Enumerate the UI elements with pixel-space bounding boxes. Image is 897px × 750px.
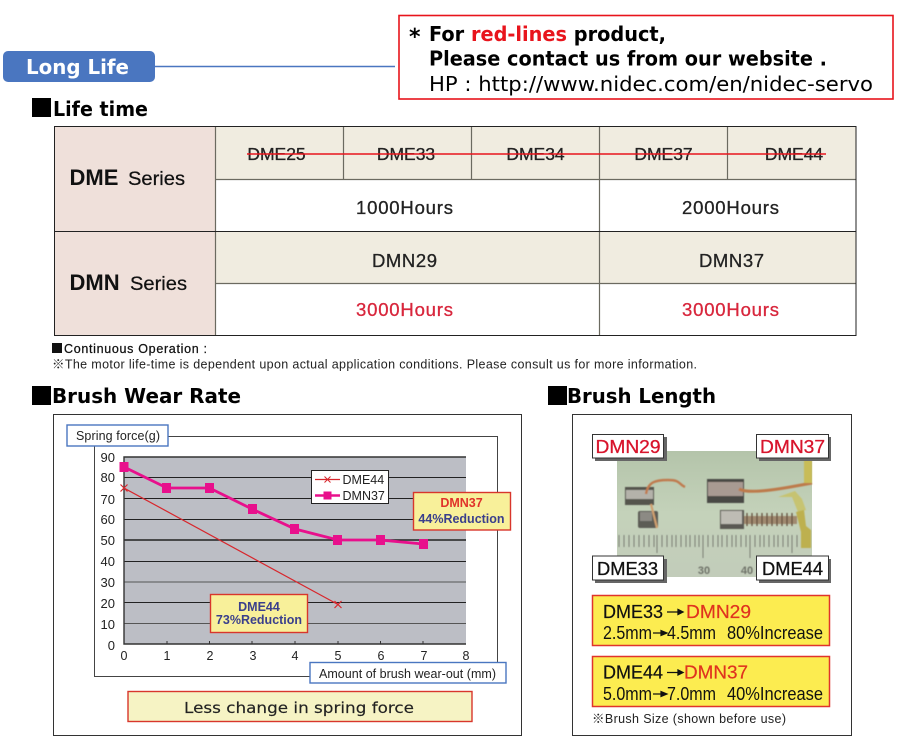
heading: Brush Length: Brush Length xyxy=(567,384,716,408)
x axis labels: 0 xyxy=(121,649,128,663)
legend: DME44 xyxy=(342,473,384,487)
label: DME33: DME33 xyxy=(597,559,658,579)
callout: DME44 reduction xyxy=(210,594,308,632)
callout: less change in spring force xyxy=(128,692,472,722)
y axis labels: 40 xyxy=(101,554,115,569)
axis label: spring force xyxy=(67,425,168,446)
x axis labels xyxy=(121,649,470,663)
y axis labels: 60 xyxy=(101,512,115,527)
label: DMN29: DMN29 xyxy=(596,437,660,457)
axis label: brush wear-out xyxy=(310,662,506,683)
axis label: brush wear-out: Amount of brush wear-out (mm) xyxy=(319,667,496,681)
DME life hours xyxy=(356,197,779,218)
callout: DME33 to DMN29: 4.5mm xyxy=(667,623,716,643)
brush DME44 xyxy=(720,510,811,548)
DME life hours: 2000Hours xyxy=(682,197,779,218)
brush DMN29 xyxy=(625,480,685,505)
callout: DME33 to DMN29: 2.5mm xyxy=(603,623,652,643)
life time table xyxy=(54,126,856,336)
heading: Brush Wear Rate: Brush Wear Rate xyxy=(52,384,241,408)
series: DME44 xyxy=(120,484,342,608)
y axis labels: 90 xyxy=(101,450,115,465)
DME series header: DME xyxy=(70,165,118,190)
section tag: Long Life: Long Life xyxy=(26,55,129,79)
chart frame xyxy=(94,436,498,676)
section tag: Long Life xyxy=(3,51,395,82)
callout: DMN37 reduction: 44%Reduction xyxy=(418,512,505,526)
y axis labels: 80 xyxy=(101,470,115,485)
ruler ticks xyxy=(619,535,807,558)
DMN life hours: 3000Hours xyxy=(682,299,779,320)
callout: DME44 to DMN37: 40%Increase xyxy=(727,684,823,704)
callout: DMN37 reduction: DMN37 xyxy=(440,496,483,510)
note: brush size: ※Brush Size (shown before use) xyxy=(592,712,786,726)
callout: DME44 to DMN37: DME44 xyxy=(603,662,663,682)
label: DMN37: DMN37 xyxy=(760,437,825,457)
label: DME44: DME44 xyxy=(762,559,823,579)
callout: DME33 to DMN29: DME33 xyxy=(603,602,663,622)
y axis labels: 10 xyxy=(101,617,115,632)
callout: DME33 to DMN29: 80%Increase xyxy=(727,623,823,643)
legend xyxy=(312,470,388,504)
label: DMN29 xyxy=(592,434,667,461)
y axis labels: 30 xyxy=(101,575,115,590)
y axis labels: 70 xyxy=(101,492,115,507)
notice box: red-lines product contact: For red-lines product, xyxy=(429,22,666,46)
y axis labels: 50 xyxy=(101,533,115,548)
x axis labels: 4 xyxy=(292,649,299,663)
callout: DME33 to DMN29 xyxy=(592,596,830,646)
DMN model names: DMN37 xyxy=(699,250,764,271)
DMN series header: Series xyxy=(130,273,187,295)
DMN life hours: 3000Hours xyxy=(356,299,453,320)
photo: brushes on a ruler: 40 xyxy=(741,565,753,577)
x axis labels: 3 xyxy=(250,649,257,663)
notice box: red-lines product contact xyxy=(399,16,893,99)
y axis labels xyxy=(101,450,115,653)
callout: DME44 to DMN37: 7.0mm xyxy=(667,684,716,704)
table footnotes: ※The motor life-time is dependent upon actual application conditions. Please consult us for more information. xyxy=(52,358,697,372)
x axis labels: 6 xyxy=(378,649,385,663)
label: DME33 xyxy=(592,556,667,583)
brush DME33 xyxy=(638,504,658,528)
callout: DME33 to DMN29: DMN29 xyxy=(686,602,751,622)
label: DMN37 xyxy=(756,434,831,461)
notice box: red-lines product contact: Please contact us from our website . xyxy=(429,46,827,70)
x axis labels: 7 xyxy=(421,649,428,663)
callout: DME44 to DMN37 xyxy=(592,656,830,706)
DMN life hours xyxy=(356,299,779,320)
callout: DME44 to DMN37: 5.0mm xyxy=(603,684,652,704)
line chart xyxy=(101,450,470,663)
DME model names: DME44 xyxy=(765,144,823,164)
label: DME44 xyxy=(756,556,831,583)
callout: DME44 reduction: DME44 xyxy=(238,600,280,614)
DMN model names: DMN29 xyxy=(372,250,437,271)
DME series header xyxy=(54,126,215,232)
DMN series header: DMN xyxy=(70,270,120,295)
red strike-through line xyxy=(247,153,826,155)
heading: Life time: Life time xyxy=(53,97,148,121)
photo: brushes on a ruler: 30 xyxy=(698,565,710,577)
DME model names: DME34 xyxy=(506,144,565,164)
DME model names: DME25 xyxy=(247,144,306,164)
DME model names: DME33 xyxy=(377,144,435,164)
y axis labels: 0 xyxy=(108,638,115,653)
panel: brush wear rate xyxy=(54,414,522,736)
series: DMN37 xyxy=(120,462,428,549)
DME life hours: 1000Hours xyxy=(356,197,453,218)
callout: less change in spring force: Less change in spring force xyxy=(184,699,414,717)
table footnotes xyxy=(52,342,697,372)
legend: DMN37 xyxy=(342,489,385,503)
panel: brush length xyxy=(572,414,852,736)
notice box: red-lines product contact: HP : http://www.nidec.com/en/nidec-servo xyxy=(429,72,873,96)
DMN model names xyxy=(372,250,764,271)
DME model names: DME37 xyxy=(634,144,693,164)
DME series header: Series xyxy=(128,168,185,190)
axis label: spring force: Spring force(g) xyxy=(76,429,160,443)
x axis labels: 1 xyxy=(164,649,171,663)
callout: DME44 to DMN37: DMN37 xyxy=(684,662,748,682)
callout: DMN37 reduction xyxy=(414,492,510,530)
photo: brushes on a ruler xyxy=(617,451,812,577)
brush DMN37 xyxy=(707,460,812,512)
notice box: red-lines product contact: * xyxy=(409,25,421,50)
x axis labels: 8 xyxy=(463,649,470,663)
callout: DME44 reduction: 73%Reduction xyxy=(216,613,302,627)
DME model names xyxy=(247,144,823,164)
y axis labels: 20 xyxy=(101,596,115,611)
x axis labels: 2 xyxy=(207,649,214,663)
x axis labels: 5 xyxy=(335,649,342,663)
table footnotes: Continuous Operation : xyxy=(64,342,207,356)
DMN series header xyxy=(54,232,215,336)
